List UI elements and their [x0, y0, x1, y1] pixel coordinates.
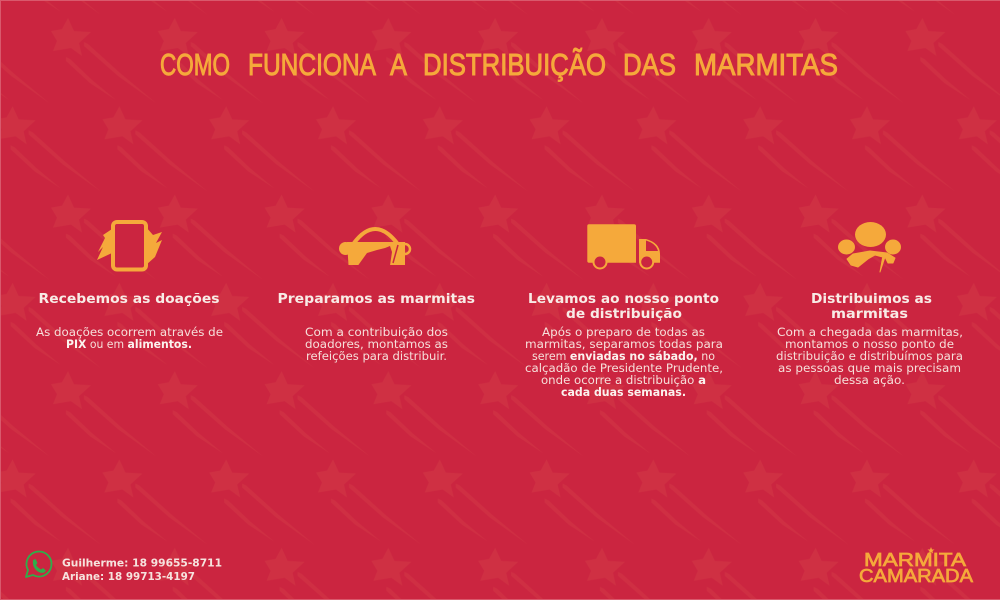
- panel: levamos ao ponto de distribuição: [525, 224, 723, 399]
- heading: Recebemos as doações: [38, 291, 220, 307]
- icon: group of people: [838, 222, 901, 272]
- panel: distribuimos as marmitas: [776, 222, 963, 387]
- title: COMO: [160, 47, 230, 82]
- description: doadores, montamos as: [305, 338, 448, 351]
- heading: de distribuição: [566, 306, 682, 322]
- title: [160, 47, 838, 82]
- icon: delivery truck: [587, 224, 660, 268]
- heading: Levamos ao nosso ponto: [528, 291, 719, 307]
- description: [525, 326, 723, 399]
- description: [305, 326, 448, 363]
- logo: marmita camarada: CAMARADA: [859, 565, 974, 586]
- contact numbers: Ariane: 18 99713-4197: [62, 570, 195, 583]
- description: marmitas, separamos todas para: [525, 338, 723, 351]
- description: Com a contribuição dos: [305, 326, 448, 339]
- description: dessa ação.: [834, 374, 905, 387]
- logo: marmita camarada: MARMITA: [864, 549, 967, 570]
- description: onde ocorre a distribuição a: [541, 374, 706, 387]
- description: refeições para distribuir.: [306, 350, 447, 363]
- contact footer: [26, 552, 222, 583]
- description: serem enviadas no sábado, no: [532, 350, 715, 363]
- description: As doações ocorrem através de: [36, 326, 223, 339]
- title: DAS: [623, 47, 676, 82]
- description: PIX ou em alimentos.: [66, 338, 192, 351]
- description: [36, 326, 223, 351]
- icon: lunch pot: [339, 229, 410, 266]
- title: DISTRIBUIÇÃO: [423, 47, 606, 82]
- description: montamos o nosso ponto de: [785, 338, 954, 351]
- heading: [811, 291, 932, 322]
- description: [776, 326, 963, 387]
- icon: phone with brush strokes: [97, 222, 162, 270]
- contact numbers: [62, 556, 222, 583]
- description: Com a chegada das marmitas,: [777, 326, 963, 339]
- heading: Distribuimos as: [811, 291, 932, 307]
- heading: [528, 291, 719, 322]
- title: A: [390, 47, 407, 82]
- panel: preparamos as marmitas: [278, 229, 475, 363]
- heading: marmitas: [831, 306, 908, 322]
- title: MARMITAS: [694, 47, 838, 82]
- description: distribuição e distribuímos para: [776, 350, 963, 363]
- description: calçadão de Presidente Prudente,: [525, 362, 723, 375]
- logo: marmita camarada: [859, 547, 974, 586]
- icon: whatsapp: [26, 552, 51, 577]
- description: cada duas semanas.: [561, 386, 686, 399]
- description: as pessoas que mais precisam: [778, 362, 961, 375]
- description: Após o preparo de todas as: [542, 326, 705, 339]
- panel: recebemos as doações: [36, 222, 223, 351]
- title: FUNCIONA: [248, 47, 376, 82]
- contact numbers: Guilherme: 18 99655-8711: [62, 556, 222, 570]
- heading: Preparamos as marmitas: [278, 291, 475, 307]
